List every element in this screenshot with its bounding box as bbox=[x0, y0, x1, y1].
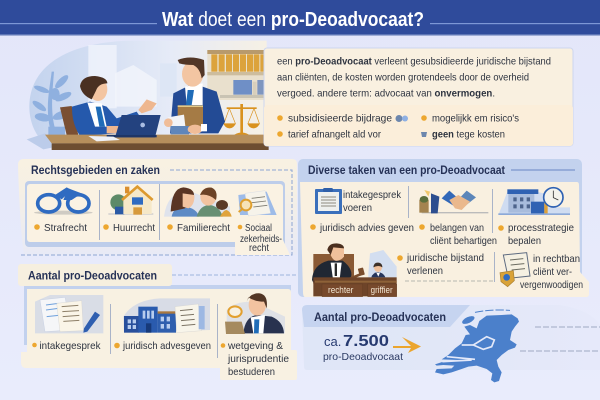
desk with laptop bbox=[27, 115, 269, 150]
label: Sociaal zekerheidsrecht bbox=[238, 223, 282, 254]
label: belangen van cliënt behartigen bbox=[419, 222, 497, 247]
icon: document and shield bbox=[500, 253, 530, 287]
standing lawyer bbox=[164, 57, 225, 134]
label: in rechtban cliënt vertegenwoordigen: vergenwoodigen bbox=[520, 279, 583, 291]
label: Sociaal zekerheidsrecht: recht bbox=[249, 243, 269, 254]
bookshelf bbox=[207, 50, 265, 100]
label: processtrategie bepalen bbox=[498, 222, 574, 247]
panel: Aantal pro-Deoadvocaten (tasks) bbox=[18, 264, 298, 380]
label: Huurrecht: Huurrecht bbox=[113, 222, 155, 234]
label: processtrategie bepalen: bepalen bbox=[508, 235, 541, 247]
label: Sociaal zekerheidsrecht: zekerheids- bbox=[240, 234, 282, 245]
icon: handcuffs bbox=[34, 187, 93, 215]
statistic: 7.500 bbox=[343, 333, 389, 350]
label: processtrategie bepalen: processtrategie bbox=[508, 222, 574, 234]
icon: clipboard bbox=[315, 188, 342, 214]
icon: lawyer studying bbox=[225, 293, 285, 334]
text: intakegesprek voeren: voeren bbox=[343, 202, 372, 214]
feature list bbox=[277, 112, 519, 140]
labels: rechter griffier: griffier bbox=[371, 285, 393, 295]
definition text: een pro-Deoadvocaat verleent gesubsidieerde juridische bijstand bbox=[277, 56, 551, 68]
seated lawyer bbox=[60, 76, 157, 136]
label: belangen van cliënt behartigen: cliënt behartigen bbox=[430, 235, 497, 247]
icon: documents and pen bbox=[35, 295, 103, 333]
feature list: tarief afnangelt ald vor bbox=[288, 128, 381, 140]
label: in rechtban cliënt vertegenwoordigen bbox=[520, 253, 583, 291]
definition text: aan cliënten, de kosten worden grotendeels door de overheid bbox=[277, 72, 529, 84]
panel: Diverse taken bbox=[298, 159, 589, 297]
label: wetgeving & jurisprudentie bestuderen bbox=[221, 340, 289, 378]
panel: Aantal with map bbox=[302, 305, 600, 382]
icon: family bbox=[164, 187, 232, 217]
icon: document with magnifier bbox=[238, 191, 277, 216]
panel: Rechtsgebieden en zaken bbox=[18, 159, 297, 255]
icon: house bbox=[108, 187, 153, 215]
label: intakegesprek: intakegesprek bbox=[40, 340, 101, 352]
label: juridische bijstand verlenen: juridische bijstand bbox=[406, 252, 484, 264]
feature list: mogelijkk em risico's bbox=[432, 112, 519, 124]
statistic: ca. bbox=[324, 334, 341, 349]
text: intakegesprek voeren bbox=[343, 189, 402, 214]
label: Sociaal zekerheidsrecht: Sociaal bbox=[245, 223, 272, 234]
title: Wat doet een pro-Deoadvocaat? bbox=[162, 8, 424, 31]
label: in rechtban cliënt vertegenwoordigen: cliënt ver- bbox=[533, 266, 572, 278]
heading: Rechtsgebieden en zaken bbox=[31, 163, 160, 177]
icon: office buildings with document bbox=[123, 298, 210, 333]
label: Familierecht: Familierecht bbox=[177, 222, 230, 234]
label: juridische bijstand verlenen bbox=[397, 252, 484, 277]
heading: Diverse taken van een pro-Deoadvocaat bbox=[308, 163, 505, 177]
statistic bbox=[323, 333, 403, 363]
illustration: courtroom bbox=[312, 243, 397, 297]
label: juridische bijstand verlenen: verlenen bbox=[407, 265, 443, 277]
panel: definition bbox=[264, 48, 573, 146]
map: Netherlands bbox=[435, 310, 519, 382]
heading: Aantal pro-Deoadvocaten bbox=[28, 268, 157, 282]
icon: plant bbox=[31, 72, 73, 135]
label: Strafrecht: Strafrecht bbox=[44, 222, 87, 234]
feature list: geen tege kosten bbox=[432, 128, 505, 140]
header: title bar bbox=[0, 0, 600, 36]
label: in rechtban cliënt vertegenwoordigen: in rechtban bbox=[533, 253, 580, 265]
label: wetgeving & jurisprudentie bestuderen: bestuderen bbox=[228, 366, 275, 378]
heading: Aantal pro-Deoadvocaten bbox=[314, 310, 446, 324]
feature list: subsidisieerde bijdrage bbox=[288, 112, 392, 124]
icon: building and clock bbox=[498, 188, 570, 215]
labels: rechter griffier bbox=[328, 285, 393, 295]
label: wetgeving & jurisprudentie bestuderen: wetgeving & bbox=[227, 340, 283, 352]
definition text bbox=[277, 56, 551, 100]
label: juridisch advies geven: juridisch advies geven bbox=[319, 222, 414, 234]
label: juridisch advies geven: juridisch advesgeven bbox=[122, 340, 211, 352]
icon: handshake bbox=[419, 190, 488, 213]
statistic: pro-Deoadvocaat bbox=[323, 351, 403, 363]
text: intakegesprek voeren: intakegesprek bbox=[343, 189, 402, 201]
label: wetgeving & jurisprudentie bestuderen: jurisprudentie bbox=[227, 353, 289, 365]
label: belangen van cliënt behartigen: belangen van bbox=[430, 222, 484, 234]
definition text: vergoed. andere term: advocaat van onvermogen. bbox=[277, 88, 495, 100]
arrow bbox=[393, 337, 421, 353]
labels: rechter griffier: rechter bbox=[328, 285, 353, 295]
illustration: lawyers in office bbox=[27, 41, 269, 150]
scales of justice bbox=[223, 104, 260, 137]
